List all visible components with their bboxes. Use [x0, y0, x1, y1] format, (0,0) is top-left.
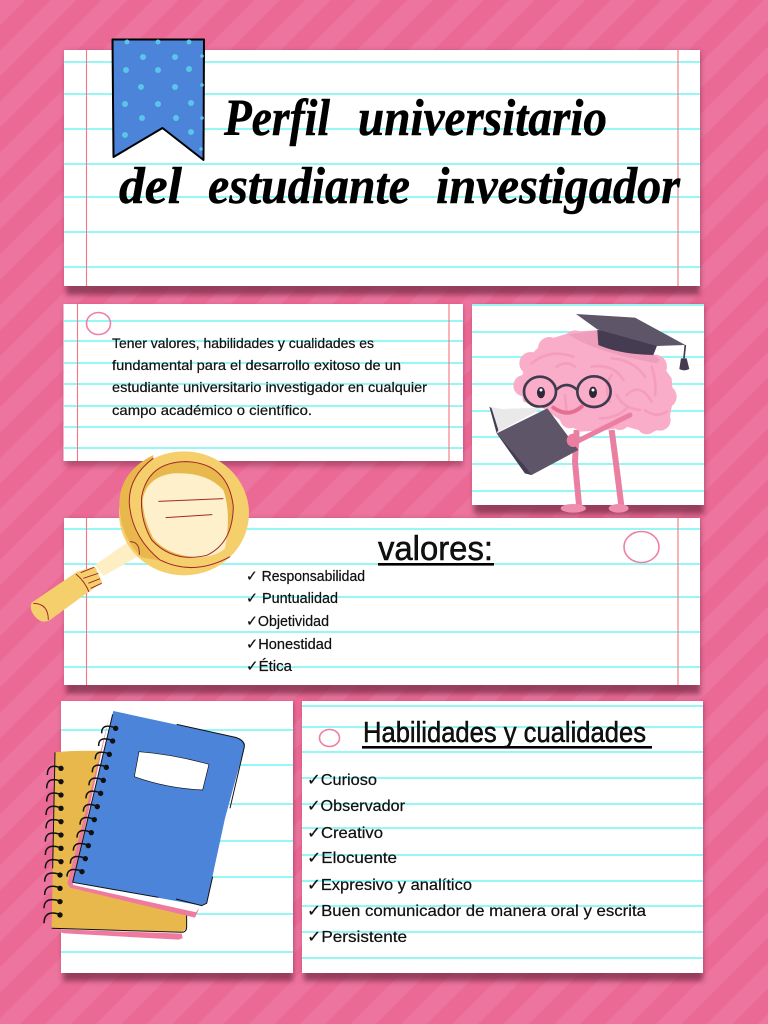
- list: valores: ✓Ética: [246, 658, 293, 675]
- list: habilidades y cualidades: ✓Expresivo y analítico: [307, 877, 472, 894]
- list: habilidades y cualidades: ✓Observador: [307, 798, 406, 815]
- list: habilidades y cualidades: ✓Buen comunicador de manera oral y escrita: [307, 903, 646, 920]
- heading: title text: universitario: [358, 90, 607, 147]
- list: valores: ✓Honestidad: [246, 636, 332, 653]
- list: valores: ✓ Responsabilidad: [246, 568, 365, 585]
- icon: pink hand-drawn circle: [624, 532, 659, 562]
- icon: pink hand-drawn circle: [320, 730, 340, 746]
- text block: introduction: campo académico o científico.: [112, 402, 312, 418]
- panel: introduction: [64, 304, 463, 466]
- list: habilidades y cualidades: ✓Persistente: [307, 929, 407, 946]
- heading: title text: investigador: [436, 158, 681, 215]
- icon: brain with graduation cap and book: [489, 314, 689, 513]
- text block: introduction: Tener valores, habilidades y cualidades es: [112, 335, 374, 351]
- text block: introduction: estudiante universitario investigador en cualquier: [112, 379, 427, 395]
- text block: introduction: fundamental para el desarrollo exitoso de un: [112, 357, 401, 373]
- text block: introduction: [112, 335, 427, 418]
- panel: habilidades y cualidades: [302, 701, 703, 981]
- list: valores: ✓ Puntualidad: [246, 590, 338, 607]
- icon: blue bookmark: [112, 40, 204, 160]
- heading: title text: [119, 90, 681, 215]
- icon: pink hand-drawn circle: [86, 312, 110, 334]
- list: valores: [246, 568, 365, 675]
- heading: habilidades y cualidades: Habilidades y cualidades: [363, 717, 646, 749]
- list: valores: ✓Objetividad: [246, 613, 329, 630]
- heading: title text: estudiante: [208, 158, 410, 215]
- heading: valores: valores:: [378, 530, 493, 568]
- panel: notebooks: [44, 701, 293, 981]
- panel: title: [64, 50, 700, 295]
- list: habilidades y cualidades: ✓Curioso: [307, 772, 377, 789]
- heading: title text: Perfil: [223, 90, 330, 147]
- list: habilidades y cualidades: ✓Creativo: [307, 825, 383, 842]
- panel: valores: [64, 518, 700, 694]
- panel: brain illustration: [472, 304, 704, 514]
- icon: yellow notebook: [44, 751, 187, 940]
- list: habilidades y cualidades: ✓Elocuente: [307, 850, 397, 867]
- heading: title text: del: [119, 158, 183, 215]
- icon: blue notebook: [67, 711, 245, 918]
- icon: magnifying glass: [31, 451, 249, 622]
- list: habilidades y cualidades: [307, 772, 646, 946]
